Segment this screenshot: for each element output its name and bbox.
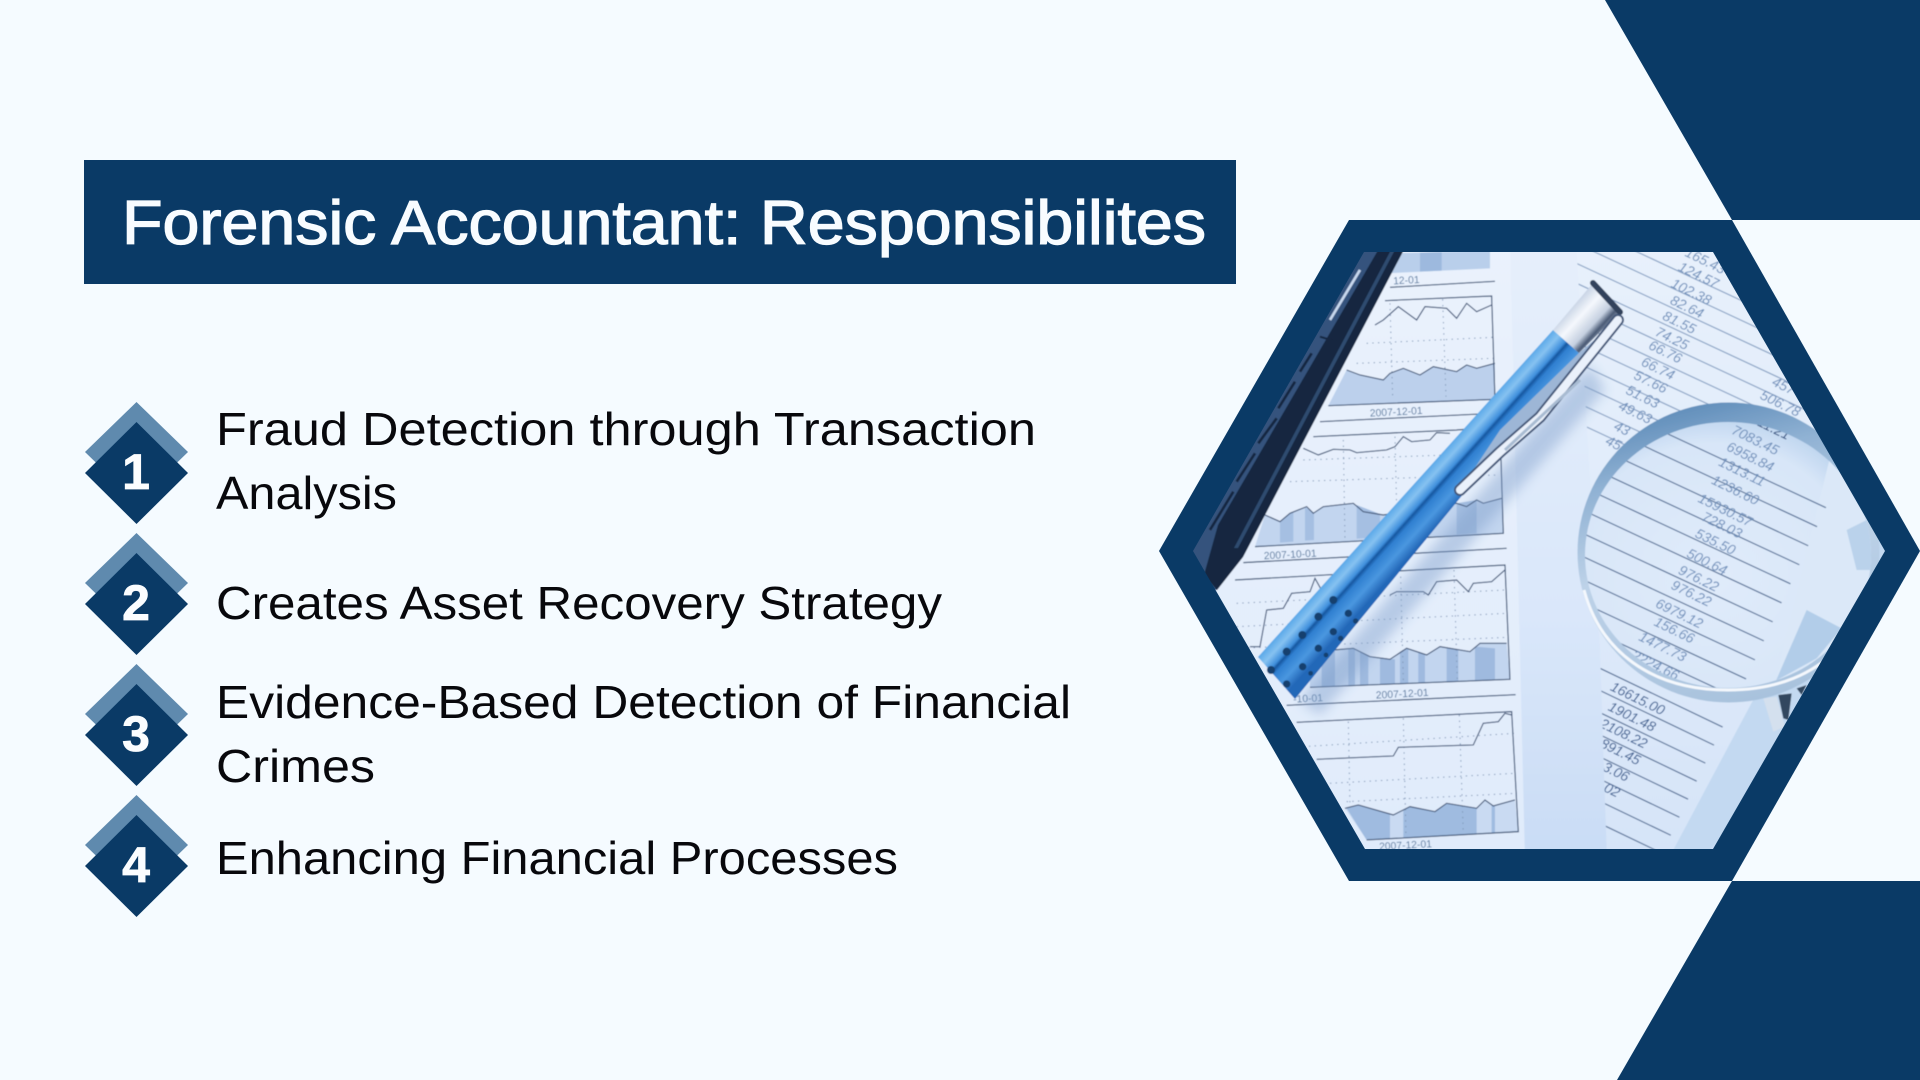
financial table paper: 45 — [1603, 432, 1625, 454]
lens contents: magnified table — [1584, 424, 1871, 688]
lens contents: magnified table: 1477.73 — [1637, 628, 1689, 665]
lens contents: magnified table: 156.66 — [1652, 613, 1697, 646]
lens contents: magnified table: 6958.84 — [1724, 438, 1777, 475]
financial table paper: 457 — [1770, 373, 1799, 398]
financial table paper: 02 — [1602, 779, 1623, 801]
financial table paper: 43 — [1612, 418, 1633, 439]
line charts, lower sheet: 2007-12-01 — [1379, 839, 1432, 853]
magnifying glass — [1577, 402, 1879, 731]
text: asset recovery: Creates Asset Recovery Strategy — [216, 577, 942, 629]
lens contents: magnified table: 1811.21 — [1741, 407, 1793, 443]
photo: financial charts, pen and magnifier — [1193, 252, 1885, 849]
icon: number 4 diamond: 4 — [122, 837, 150, 893]
icon: number 3 diamond: 3 — [122, 706, 150, 762]
list item 1 — [85, 402, 1036, 524]
lens contents: magnified table: 976.22 — [1669, 577, 1714, 610]
list item 3 — [85, 664, 1071, 792]
corner shape: bottom right — [1617, 881, 1920, 1080]
financial table paper: 124.57 — [1676, 258, 1723, 292]
financial table paper: 16615.00 — [1608, 678, 1668, 718]
magnifier handle — [1763, 685, 1807, 732]
icon: number 1 diamond: 1 — [122, 444, 150, 500]
lens rim highlight — [1584, 590, 1836, 690]
lens contents: magnified table: 1236.60 — [1709, 472, 1762, 508]
line charts, upper sheet: 2007-10-01 — [1264, 549, 1317, 562]
financial table paper: 66.76 — [1646, 337, 1685, 366]
financial table paper: 3.06 — [1600, 758, 1632, 785]
financial table paper: 165.43 — [1683, 244, 1728, 277]
text: evidence-based detection: Crimes — [216, 740, 375, 792]
financial table paper: 506.78 — [1758, 387, 1803, 420]
lens contents: magnified table: 500.64 — [1684, 545, 1730, 578]
hexagon frame — [1159, 220, 1920, 881]
icon: number 4 diamond — [85, 795, 188, 917]
blue pen — [1258, 283, 1620, 715]
line charts, upper sheet: 2007-12-01 — [1370, 406, 1423, 420]
financial table paper: 51.63 — [1624, 382, 1662, 411]
line charts, upper sheet: 12-01 — [1393, 275, 1420, 287]
icon: number 2 diamond — [85, 533, 188, 655]
icon: number 1 diamond — [85, 402, 188, 524]
icon: number 3 diamond — [85, 664, 188, 786]
lens contents: magnified table: 15930.57 — [1696, 490, 1756, 530]
financial table paper — [1577, 252, 1885, 849]
line charts, lower sheet: 2007-12-01 — [1376, 688, 1429, 702]
financial table paper: 891.45 — [1598, 735, 1643, 768]
financial table paper: 49.63 — [1616, 397, 1655, 427]
text: fraud detection — [216, 403, 1036, 519]
financial table paper: 81.55 — [1660, 307, 1699, 337]
financial table paper: 102.38 — [1669, 275, 1714, 308]
financial table paper: 2108.22 — [1597, 714, 1650, 752]
financial table paper: 82.64 — [1668, 292, 1707, 321]
lens contents: magnified table: 6979.12 — [1653, 595, 1706, 632]
lens contents: magnified table: 728.03 — [1699, 508, 1745, 541]
corner shape: top right — [1605, 0, 1920, 220]
text: fraud detection: Fraud Detection through Transaction — [216, 403, 1036, 455]
financial table paper: 66.74 — [1639, 353, 1678, 383]
list item 4 — [85, 795, 898, 917]
title banner: Forensic Accountant: Responsibilites — [122, 189, 1206, 258]
lens contents: magnified table: 2224.66 — [1628, 646, 1682, 683]
list item 2 — [85, 533, 942, 655]
text: fraud detection: Analysis — [216, 467, 397, 519]
lens contents: magnified table: 1313.11 — [1716, 453, 1768, 490]
dark phone device — [1193, 252, 1404, 590]
text: evidence-based detection: Evidence-Based Detection of Financial — [216, 676, 1071, 728]
line charts, upper sheet — [1243, 251, 1507, 563]
line charts, lower sheet: -10-01 — [1293, 693, 1324, 706]
financial table paper: 57.66 — [1632, 367, 1670, 396]
line charts, lower sheet — [1235, 565, 1518, 853]
text: enhancing processes: Enhancing Financial Processes — [216, 832, 898, 884]
lens contents: magnified table: 976.22 — [1676, 562, 1722, 595]
lens contents: magnified table: 535.50 — [1693, 525, 1738, 558]
icon: number 2 diamond: 2 — [122, 575, 150, 631]
text: evidence-based detection — [216, 676, 1071, 792]
financial table paper: 1901.48 — [1606, 698, 1659, 735]
financial table paper: 74.25 — [1653, 323, 1692, 353]
pen grip dots — [1267, 596, 1358, 688]
lens contents: magnified table: 7083.45 — [1729, 422, 1782, 458]
title banner — [84, 160, 1236, 284]
